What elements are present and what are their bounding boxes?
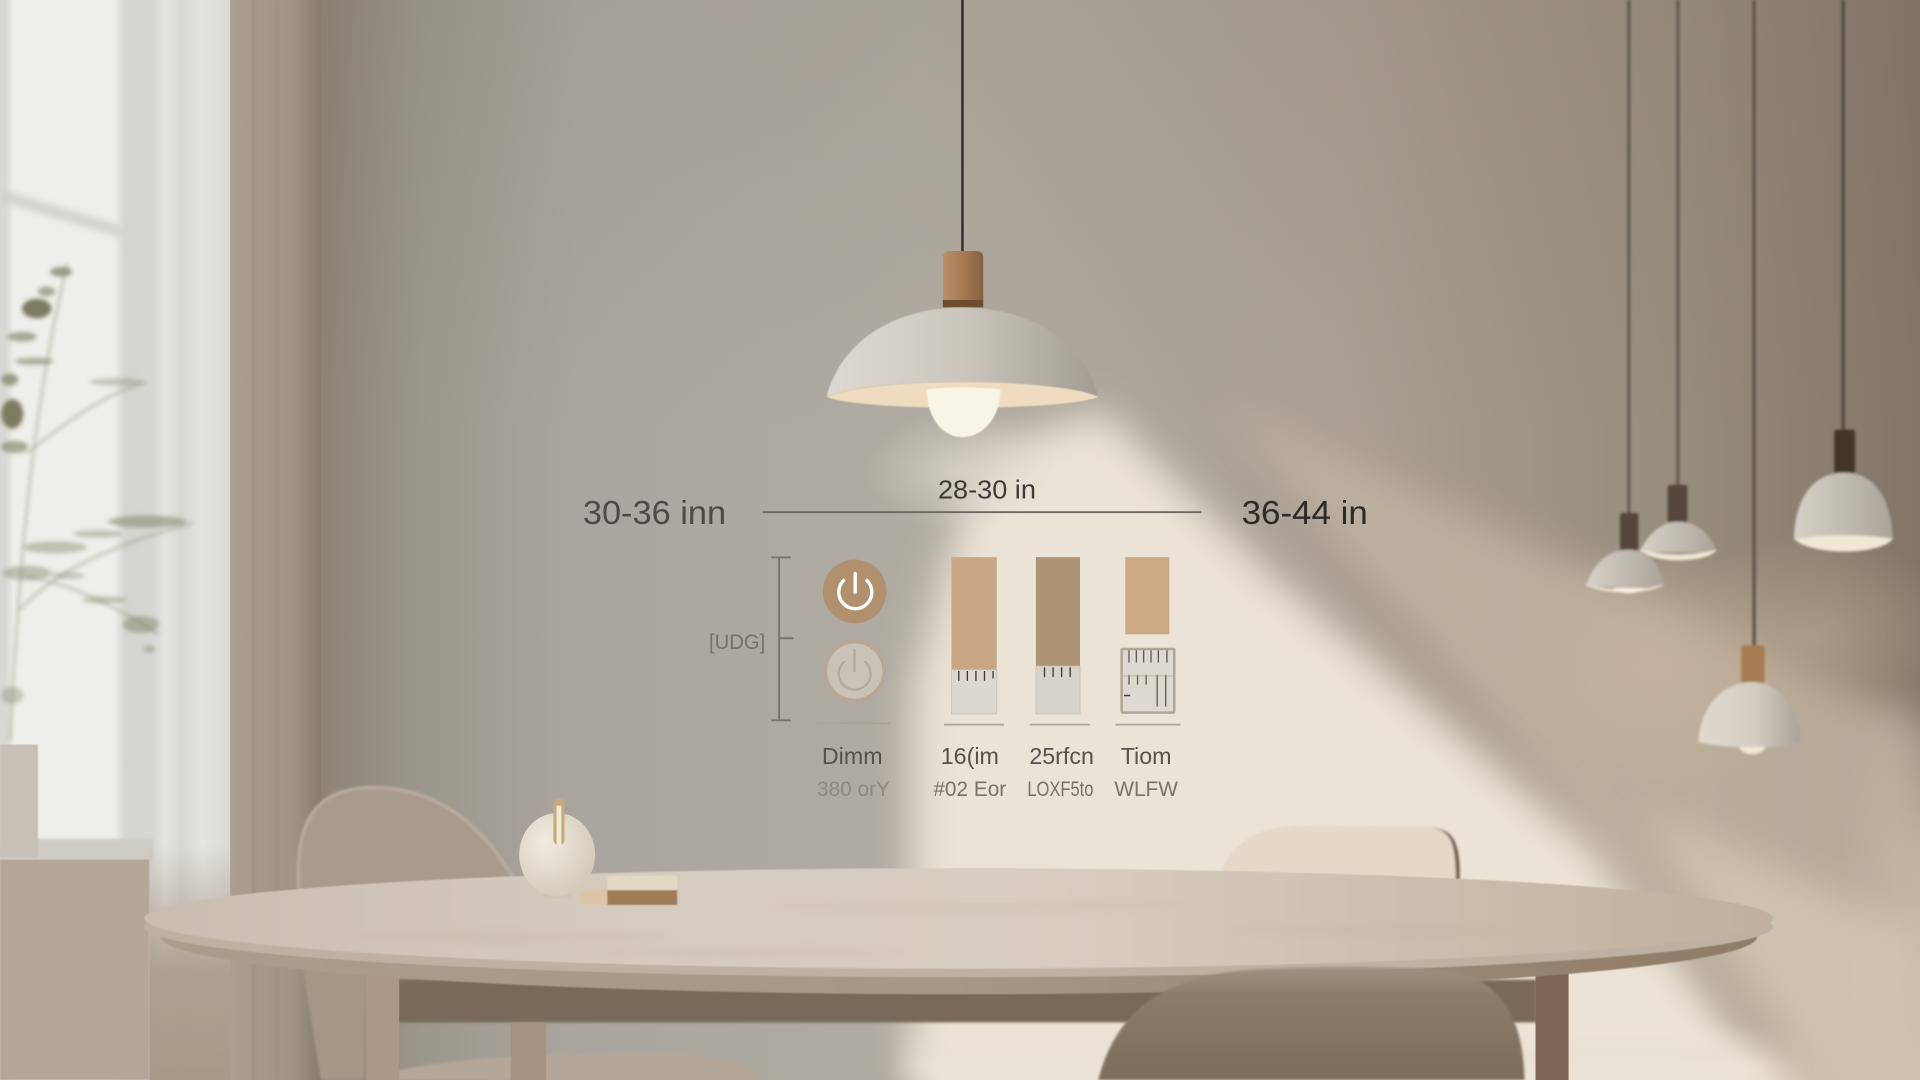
lamp shade dome <box>827 307 1098 397</box>
column labels: Dimm <box>822 743 883 769</box>
background pendant 2 <box>1640 0 1717 560</box>
plant in vase <box>0 263 193 857</box>
bracket label: [UDG] <box>709 631 765 654</box>
right dimension label: 36-44 in <box>1242 495 1368 532</box>
dimension line <box>763 511 1201 513</box>
sculptural vase <box>519 798 595 899</box>
lamp cord <box>961 0 964 252</box>
wooden cap <box>943 251 983 307</box>
shade underside <box>827 382 1098 408</box>
drapery curtain <box>230 0 321 1080</box>
left chair legs and seat <box>302 967 769 1080</box>
background pendant 4 <box>1794 0 1893 552</box>
main pendant lamp <box>827 0 1098 437</box>
bulb <box>927 388 1000 437</box>
bar 1 <box>951 557 997 714</box>
table <box>144 868 1773 1080</box>
column sublabels <box>817 778 1178 801</box>
background pendant 1 <box>1586 0 1664 593</box>
table top <box>144 868 1773 977</box>
left dimension label: 30-36 inn <box>583 495 726 532</box>
column labels: Tiom <box>1121 743 1172 769</box>
column labels: 25rfcn <box>1029 743 1094 769</box>
column labels <box>822 743 1172 769</box>
column sublabels: WLFW <box>1114 778 1178 801</box>
column labels: 16(im <box>941 743 999 769</box>
center dimension label: 28-30 in <box>938 476 1036 504</box>
window and sheer curtain <box>0 0 235 1080</box>
column sublabels: 380 orY <box>817 778 890 801</box>
table stretcher <box>398 980 1537 1022</box>
column sublabels: LOXF5to <box>1027 778 1093 801</box>
column underlines <box>818 722 1180 726</box>
back chair left <box>298 787 512 943</box>
background pendant 3 <box>1698 0 1801 754</box>
vertical bracket <box>771 557 793 721</box>
light beam on wall <box>864 404 1920 1080</box>
marble streaks <box>355 902 1518 956</box>
back chair right <box>1222 827 1460 882</box>
front chair <box>1098 967 1524 1080</box>
icon: power off <box>825 642 884 700</box>
bar 2 <box>1036 557 1080 714</box>
table apron <box>160 879 1757 994</box>
icon: power on <box>823 560 887 623</box>
table legs <box>366 973 1569 1080</box>
stacked blocks <box>580 876 677 905</box>
column sublabels: #02 Eor <box>933 778 1006 801</box>
bar 3 with ruler <box>1122 557 1174 713</box>
